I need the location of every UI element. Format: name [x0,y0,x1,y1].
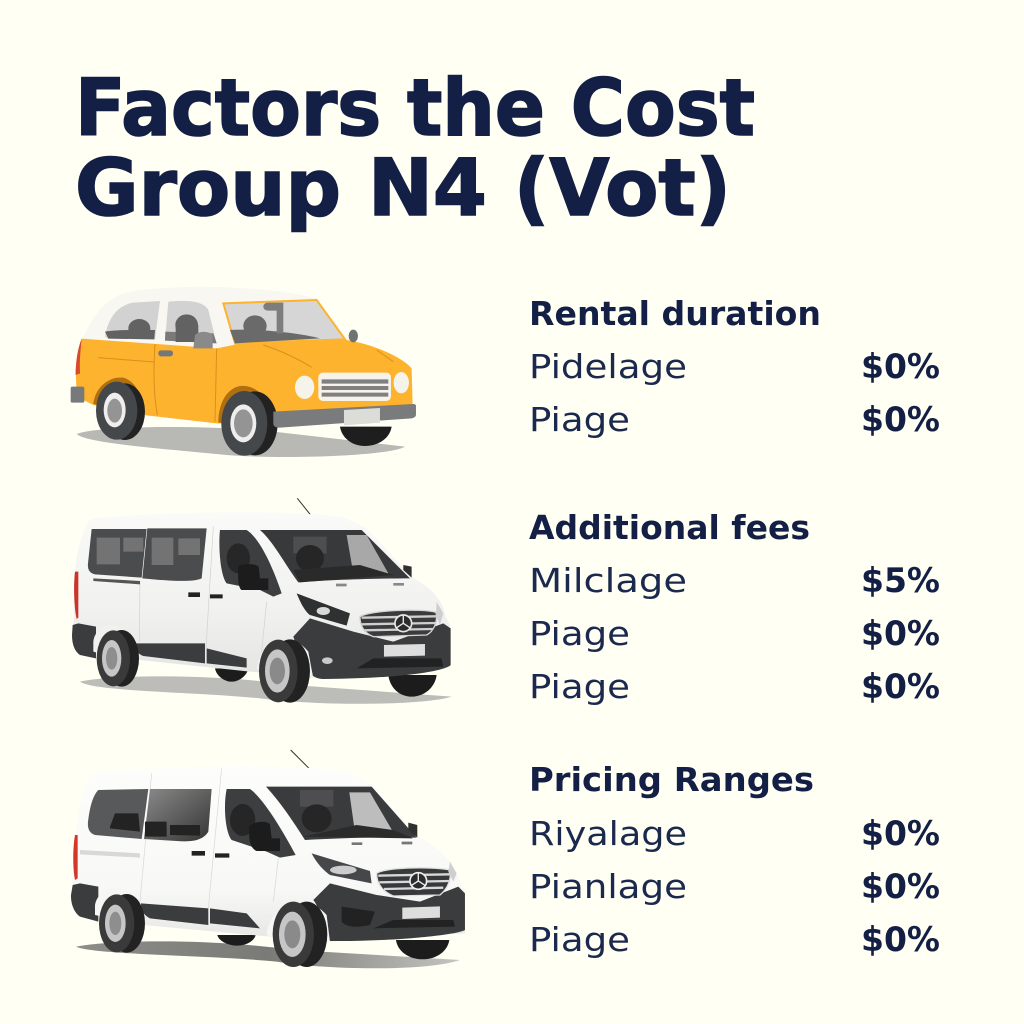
panel: pricing ranges: $0% [861,867,940,907]
panel: rental duration [529,294,940,440]
panel: rental duration: $0% [861,347,940,387]
panel: rental duration: $0% [861,400,940,440]
title: Factors the Cost [75,64,755,154]
title [75,64,755,234]
panel: rental duration: Piage [529,400,630,439]
panel: additional fees: Milclage [529,561,687,600]
panel: pricing ranges: $0% [861,814,940,854]
panel: pricing ranges: Pricing Ranges [529,760,814,799]
panel: additional fees: $0% [861,667,940,707]
windows [105,301,160,339]
panel: additional fees: $5% [861,561,940,601]
panel: pricing ranges: Pianlage [529,867,687,906]
panel: additional fees: Piage [529,614,630,653]
panel: rental duration: Pidelage [529,347,687,386]
side windows [88,789,148,839]
wheels [95,888,147,927]
panel: pricing ranges: Riyalage [529,814,687,853]
panel: additional fees [529,508,940,707]
front lower bumper [293,618,451,679]
panel: additional fees: Piage [529,667,630,706]
panel: pricing ranges: $0% [861,920,940,960]
icon: silver passenger van [72,498,452,704]
panel: pricing ranges [529,760,940,960]
front bumper [313,883,465,941]
icon: yellow car [71,287,416,457]
grille and lights [318,373,391,401]
wheels [105,383,145,440]
icon: white passenger van [71,750,465,968]
side windows [88,529,147,578]
panel: pricing ranges: Piage [529,920,630,959]
wheels [93,625,140,665]
panel: additional fees: $0% [861,614,940,654]
title: Group N4 (Vot) [75,144,731,234]
panel: rental duration: Rental duration [529,294,821,333]
panel: additional fees: Additional fees [529,508,810,547]
